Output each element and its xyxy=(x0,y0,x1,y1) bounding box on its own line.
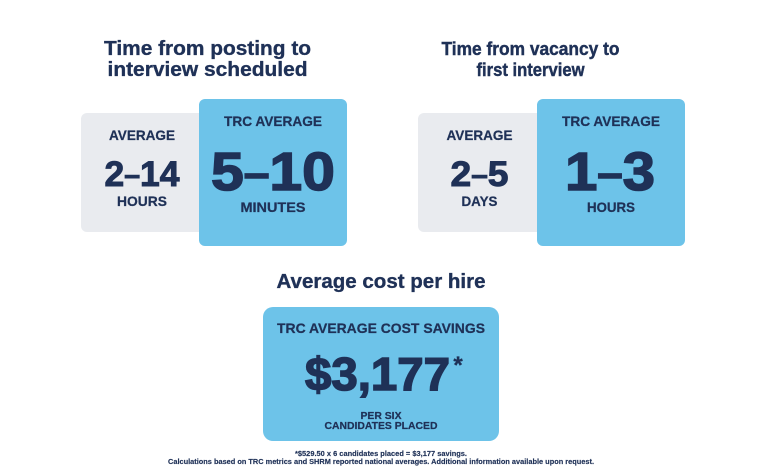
card: industry average days: DAYS xyxy=(462,193,498,209)
panel: average cost per hire xyxy=(168,271,594,466)
card: TRC average cost savings: * xyxy=(453,352,463,379)
card: industry average days: 2 xyxy=(450,155,470,194)
card: TRC average hours: 1 xyxy=(565,142,595,202)
heading: posting to interview xyxy=(104,38,311,81)
card: industry average days xyxy=(418,113,548,232)
card: industry average hours: AVERAGE xyxy=(109,127,175,143)
card: TRC average hours: TRC AVERAGE xyxy=(562,113,660,129)
heading: vacancy to first interview: first interview xyxy=(476,59,585,80)
card: industry average hours xyxy=(81,113,211,232)
card: industry average hours: HOURS xyxy=(117,193,167,209)
card: TRC average hours xyxy=(537,99,685,246)
card: TRC average minutes: – xyxy=(244,149,269,196)
card: TRC average minutes: MINUTES xyxy=(240,199,306,215)
card: TRC average cost savings: $3,177 xyxy=(305,348,450,400)
heading: posting to interview: interview scheduled xyxy=(108,59,308,81)
heading: posting to interview: Time from posting to xyxy=(104,38,311,60)
card: TRC average cost savings: TRC AVERAGE COST SAVINGS xyxy=(277,320,485,336)
panel: time from posting to interview scheduled xyxy=(81,38,347,246)
card: TRC average minutes: 10 xyxy=(269,142,335,202)
card: TRC average cost savings xyxy=(263,307,499,441)
panel: time from vacancy to first interview xyxy=(418,38,685,246)
card: industry average hours: 14 xyxy=(140,155,180,194)
footnote xyxy=(168,451,594,466)
card: TRC average hours: HOURS xyxy=(587,199,635,215)
card: industry average days: 5 xyxy=(488,155,509,194)
card: TRC average cost savings: CANDIDATES PLACED xyxy=(324,420,438,432)
card: industry average days: AVERAGE xyxy=(446,127,512,143)
card: TRC average minutes: 5 xyxy=(211,142,241,202)
heading: vacancy to first interview xyxy=(442,38,620,80)
card: TRC average minutes xyxy=(199,99,347,246)
heading: average cost per hire: Average cost per hire xyxy=(276,271,486,293)
card: TRC average hours: 3 xyxy=(623,142,655,202)
card: industry average hours: – xyxy=(124,159,140,190)
card: TRC average minutes: TRC AVERAGE xyxy=(224,113,322,129)
heading: vacancy to first interview: Time from vacancy to xyxy=(442,38,620,59)
card: industry average days: – xyxy=(471,159,488,190)
card: industry average hours: 2 xyxy=(104,155,124,194)
card: TRC average cost savings: PER SIX xyxy=(360,410,402,422)
footnote: *$529.50 x 6 candidates placed = $3,177 savings. xyxy=(295,451,467,458)
card: TRC average hours: – xyxy=(597,149,623,196)
footnote: Calculations based on TRC metrics and SHRM reported national averages. Additional information available upon request. xyxy=(168,459,594,466)
